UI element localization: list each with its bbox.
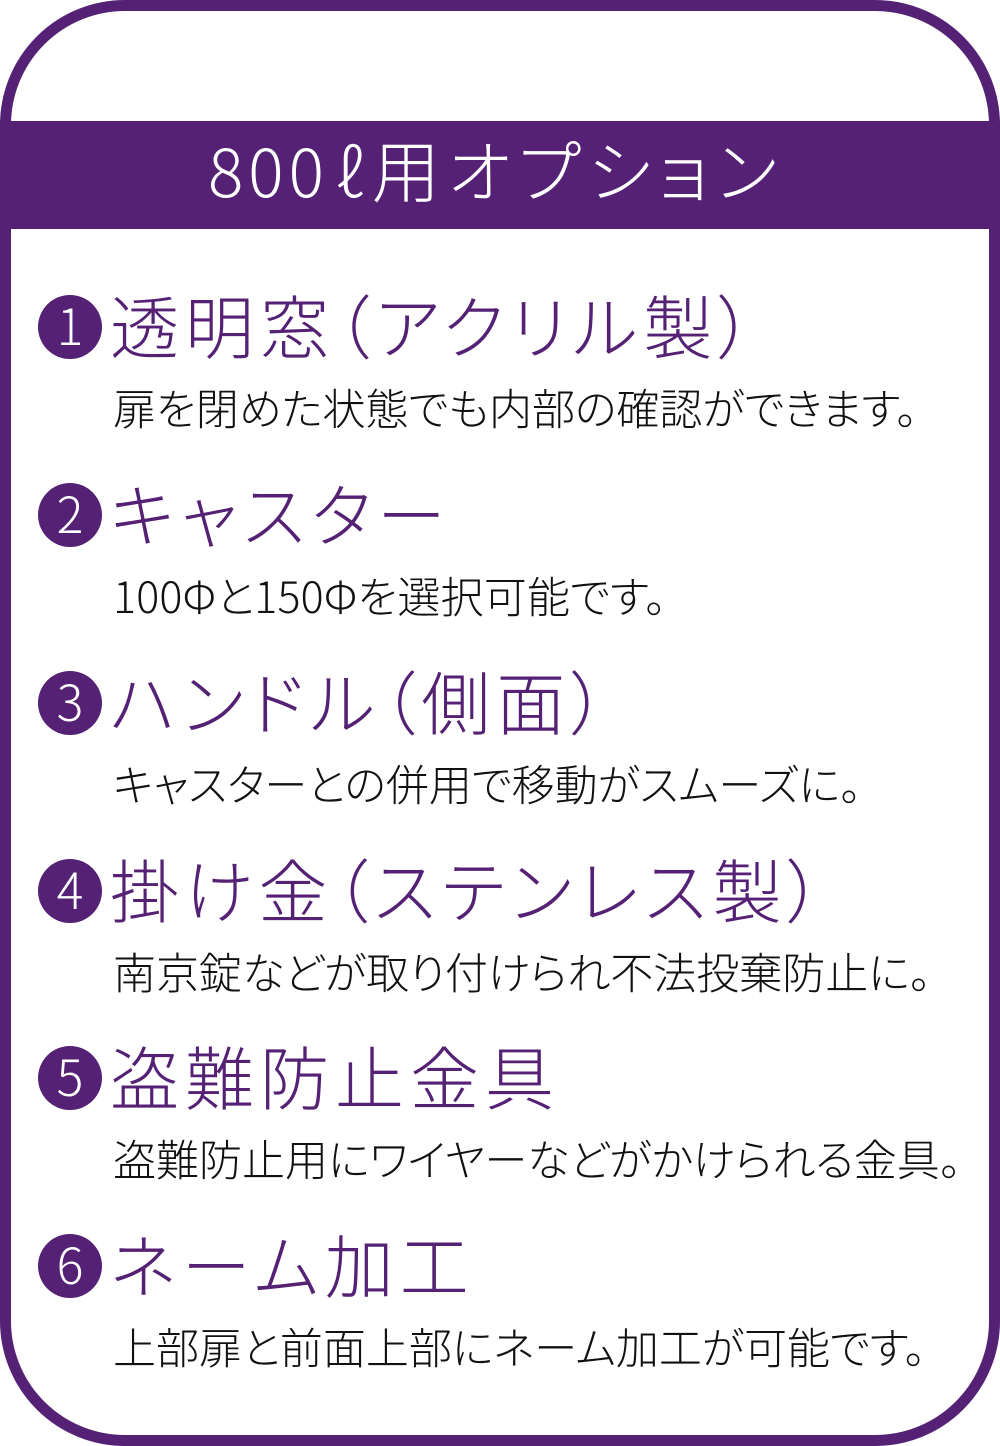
item 3 description: キャスターとの併用で移動がスムーズに。: [113, 752, 862, 814]
item 2 heading: キャスター: [110, 461, 451, 561]
item 4 number: 4: [57, 852, 83, 924]
item 2 number: 2: [57, 476, 83, 548]
item 5 heading: 盗難防止金具: [110, 1024, 560, 1124]
item 1 number: 1: [57, 288, 83, 360]
item 5 description: 盗難防止用にワイヤーなどがかけられる金具。: [113, 1127, 961, 1189]
item 1 description: 扉を閉めた状態でも内部の確認ができます。: [113, 376, 918, 438]
title band: [0, 121, 1000, 229]
item 4 heading: 掛け金（ステンレス製）: [110, 837, 828, 937]
item 5 number: [38, 1046, 102, 1110]
item 6 number: 6: [57, 1227, 83, 1299]
item 4 description: 南京錠などが取り付けられ不法投棄防止に。: [113, 940, 931, 1002]
item 2 description: 100Φと150Φを選択可能です。: [113, 564, 667, 626]
item 3 number: [38, 671, 102, 735]
item 5 number: 5: [57, 1039, 83, 1111]
item 3 number: 3: [57, 664, 83, 736]
item 2 number: [38, 483, 102, 547]
item 1 heading: 透明窓（アクリル製）: [110, 273, 759, 373]
item 4 number: [38, 859, 102, 923]
title: 800ℓ用オプション: [208, 118, 784, 217]
item 1 number: [38, 295, 102, 359]
item 6 number: [38, 1234, 102, 1298]
item 6 description: 上部扉と前面上部にネーム加工が可能です。: [113, 1315, 926, 1377]
item 6 heading: ネーム加工: [110, 1212, 475, 1312]
item 3 heading: ハンドル（側面）: [110, 649, 612, 749]
